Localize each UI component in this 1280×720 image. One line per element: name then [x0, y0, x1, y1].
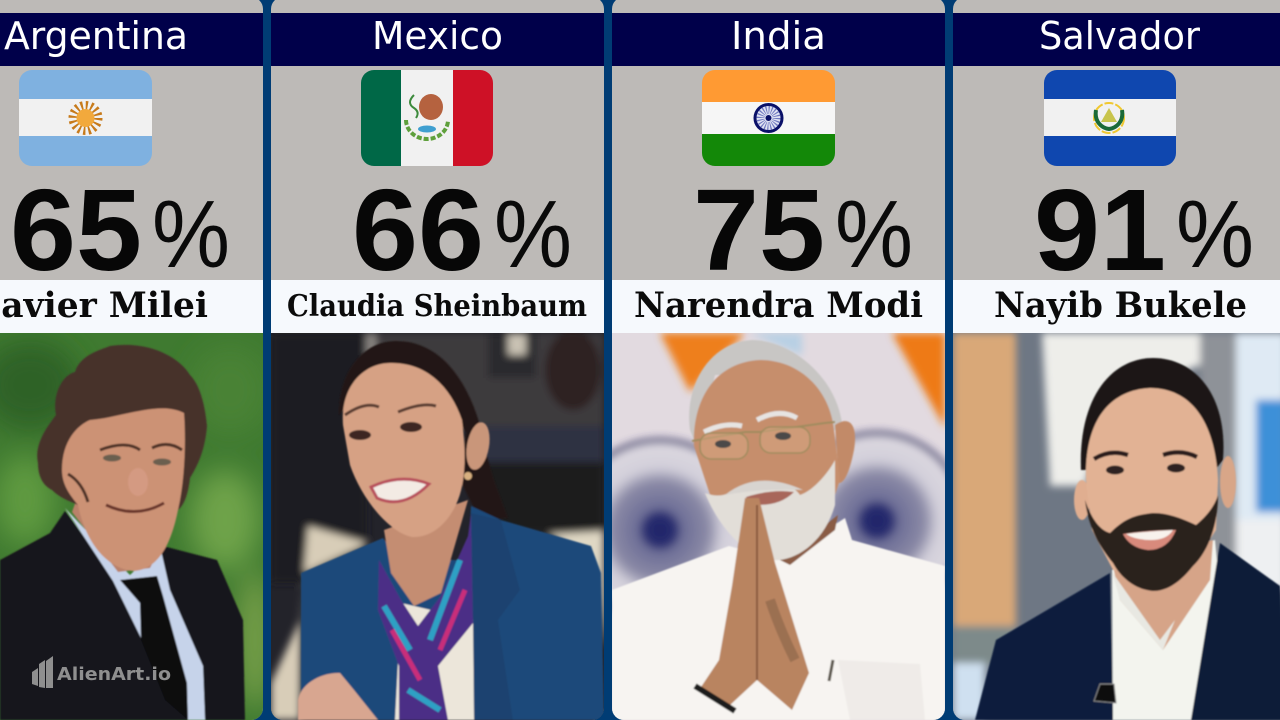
- neck shadow: [780, 515, 838, 565]
- jacket: [975, 573, 1113, 720]
- tie: [120, 576, 188, 720]
- name: Claudia Sheinbaum: Claudia Sheinbaum: [287, 289, 587, 324]
- value: 91%: 91: [1034, 165, 1166, 295]
- watermark: AlienArt.io: AlienArt.io: [57, 664, 171, 685]
- header: Argentina: [0, 13, 263, 66]
- value: 91%: [1034, 165, 1254, 295]
- pen: [829, 660, 833, 681]
- hand: [298, 673, 378, 720]
- header: India: [612, 13, 945, 66]
- panel: Mexico: [271, 0, 604, 720]
- watermark: AlienArt.io: [32, 656, 171, 688]
- value: 75%: 75: [693, 165, 825, 295]
- photo: Narendra Modi: [612, 333, 945, 720]
- value: 75%: %: [835, 181, 913, 288]
- face: [343, 363, 465, 537]
- ear: [835, 421, 855, 483]
- ears: [1074, 480, 1090, 520]
- ponytail: [462, 434, 500, 519]
- shirt: [65, 508, 205, 720]
- value: 66%: [356, 188, 569, 271]
- header: Mexico: [271, 13, 604, 66]
- face: [693, 359, 840, 496]
- kurta: [612, 518, 945, 720]
- icon: Argentina flag: [19, 70, 152, 166]
- neck: [71, 503, 152, 573]
- blazer: [301, 506, 604, 720]
- header: India: India: [731, 14, 826, 58]
- lapels: [471, 513, 520, 720]
- beard: [705, 460, 835, 560]
- panel: Argentina: [0, 0, 271, 720]
- neck: [1113, 540, 1213, 650]
- icon: El Salvador flag: [1044, 70, 1176, 166]
- panel: Salvador: [953, 0, 1280, 720]
- hair: [339, 341, 484, 440]
- neck: [384, 500, 468, 606]
- hands: [699, 498, 809, 710]
- icon: Mexico flag: [361, 70, 493, 166]
- name: Claudia Sheinbaum: [271, 280, 604, 333]
- ear: [465, 421, 490, 471]
- scarf: [378, 513, 473, 720]
- value: 65%: %: [152, 181, 230, 288]
- suit: [0, 511, 245, 720]
- photo: Javier Milei: [0, 333, 271, 720]
- panel: India: [612, 0, 945, 720]
- collar: [1112, 572, 1175, 650]
- beard: [1085, 495, 1218, 591]
- name: Narendra Modi: Narendra Modi: [634, 285, 923, 326]
- header: Argentina: Argentina: [4, 14, 188, 58]
- header: Salvador: [953, 13, 1280, 66]
- name: Nayib Bukele: [953, 280, 1280, 333]
- header: Salvador: Salvador: [1039, 14, 1200, 58]
- value: 66%: %: [494, 181, 572, 288]
- microphone: [1094, 684, 1116, 703]
- name: Javier Milei: [0, 280, 263, 333]
- value: 91%: %: [1176, 181, 1254, 288]
- hair: [1081, 358, 1224, 470]
- brows and glasses: [704, 413, 797, 432]
- photo: Claudia Sheinbaum: [271, 330, 604, 720]
- face: [62, 408, 185, 571]
- hair: [37, 345, 207, 520]
- value: 75%: [698, 190, 910, 271]
- face: [1086, 388, 1218, 570]
- hair: [689, 340, 842, 450]
- white top: [395, 603, 474, 720]
- header: Mexico: Mexico: [372, 14, 503, 58]
- value: 65%: [14, 188, 227, 271]
- brows and eyes: [1094, 452, 1197, 459]
- value: 65%: 65: [10, 165, 142, 295]
- wristband: [695, 686, 735, 711]
- icon: India flag: [702, 70, 835, 166]
- shirt: [1112, 540, 1220, 720]
- mouth: [1123, 530, 1176, 550]
- name: Narendra Modi: [612, 280, 945, 333]
- name: Nayib Bukele: Nayib Bukele: [994, 285, 1247, 326]
- photo: Nayib Bukele: [953, 333, 1280, 720]
- value: 66%: 66: [352, 165, 484, 295]
